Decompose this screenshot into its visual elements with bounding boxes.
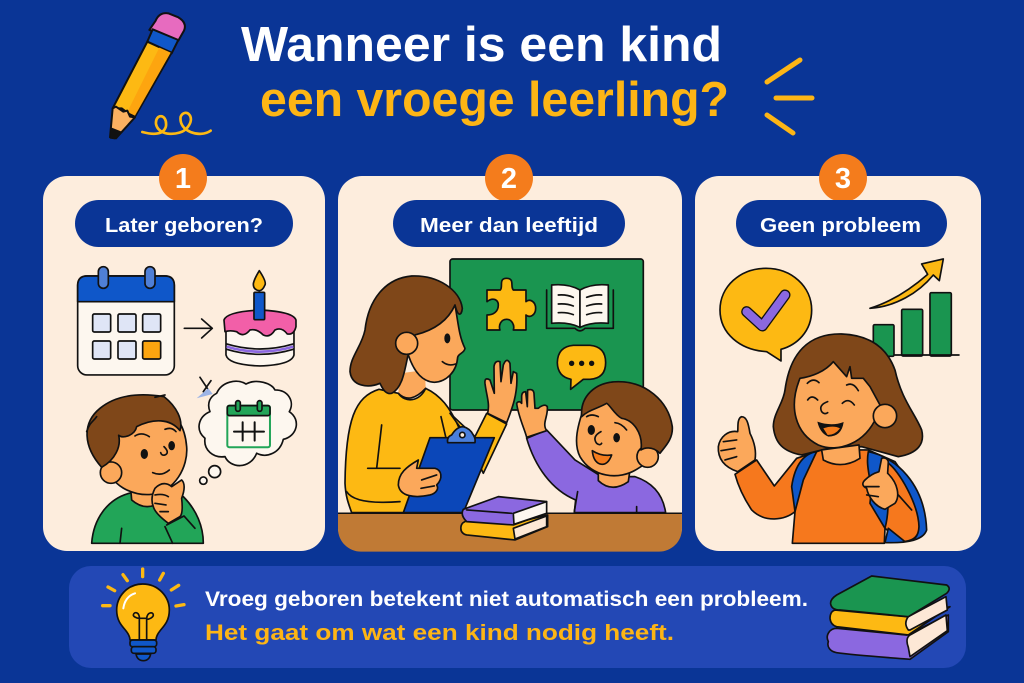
bar chart with arrow — [870, 259, 959, 356]
backpack straps — [792, 452, 817, 512]
hand with thumb up — [718, 417, 755, 472]
arrow — [184, 319, 212, 338]
icon: open book — [547, 285, 613, 331]
heading pill: Geen probleem: Geen probleem — [760, 214, 921, 237]
figure: boy — [517, 382, 672, 513]
heading pill: Meer dan leeftijd: Meer dan leeftijd — [420, 214, 598, 237]
icon: orange emphasis rays — [767, 60, 812, 133]
banner text: Vroeg geboren betekent niet automatisch een probleem. — [205, 587, 808, 611]
illustration: teacher and boy high five — [338, 259, 682, 552]
number badge 2: 2 — [501, 163, 517, 195]
panel: later geboren — [43, 154, 325, 551]
title: een vroege leerling? — [260, 73, 729, 127]
bottom message banner — [69, 566, 966, 668]
illustration: happy girl with chart — [718, 259, 959, 543]
heading pill: Meer dan leeftijd — [393, 200, 625, 247]
green board — [450, 259, 643, 410]
icon: pencil with squiggle — [110, 13, 211, 139]
number badge 3: 3 — [835, 163, 851, 195]
icon: light bulb — [103, 569, 184, 661]
icon: puzzle piece — [487, 278, 536, 330]
icon: birthday cake — [224, 271, 296, 366]
number badge 1: 1 — [175, 163, 191, 195]
icon: stack of books — [827, 576, 950, 659]
panel: geen probleem — [695, 154, 981, 551]
wooden table — [338, 513, 682, 552]
icon: stack of books — [461, 497, 548, 540]
hair — [773, 334, 922, 457]
icon: speech bubble — [557, 345, 606, 389]
illustration: calendar, cake and thinking boy — [78, 267, 296, 543]
banner text — [205, 587, 808, 645]
clipboard — [403, 427, 494, 513]
figure: girl — [718, 334, 927, 543]
banner text: Het gaat om wat een kind nodig heeft. — [205, 620, 674, 645]
hand on strap — [863, 458, 898, 509]
heading pill: Later geboren? — [75, 200, 293, 247]
title: Wanneer is een kind — [241, 18, 722, 72]
panel: meer dan leeftijd — [338, 154, 682, 552]
icon: calendar — [78, 267, 174, 375]
figure: thinking boy — [87, 395, 203, 543]
number badge 2 — [485, 154, 533, 202]
title — [241, 18, 729, 127]
figure: teacher — [345, 276, 517, 513]
number badge 1 — [159, 154, 207, 202]
heading pill: Geen probleem — [736, 200, 947, 247]
icon: thought cloud with small calendar — [197, 377, 296, 484]
icon: check speech bubble — [720, 268, 812, 361]
number badge 3 — [819, 154, 867, 202]
face — [794, 362, 880, 448]
heading pill: Later geboren?: Later geboren? — [105, 214, 263, 237]
raised hand — [485, 360, 517, 423]
